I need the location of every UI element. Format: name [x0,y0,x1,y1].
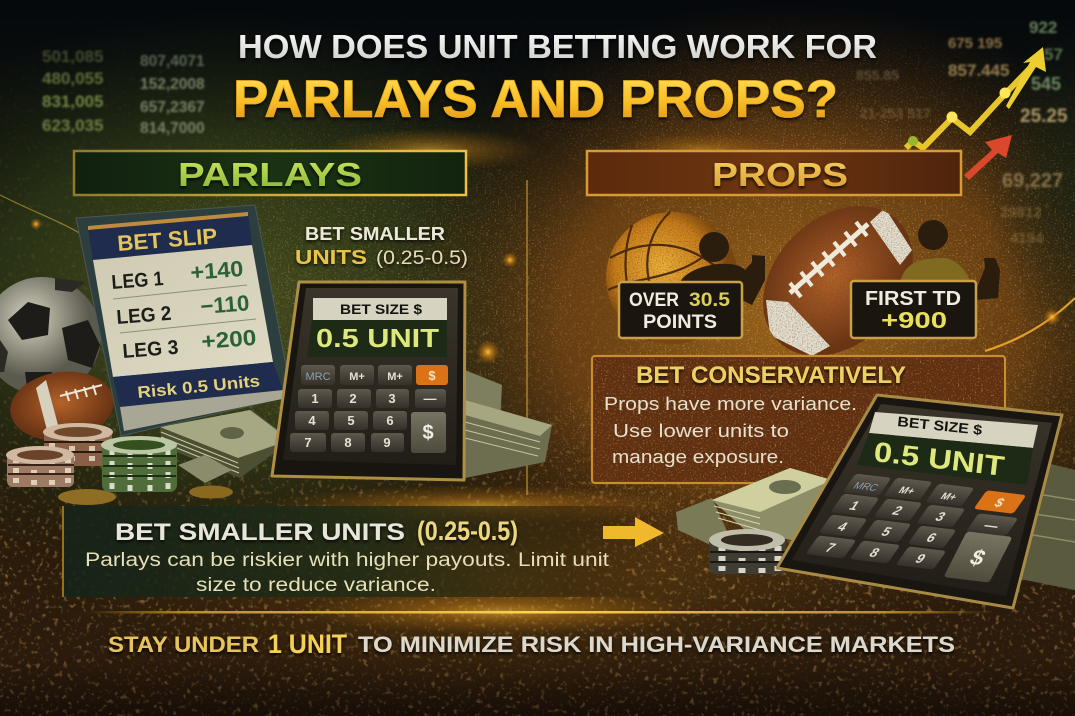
calculator keys: 6 [386,413,394,428]
label: first td +900: +900 [881,307,947,333]
calculator keys: 3 [388,391,396,406]
background ticker numbers: 623,035 [42,116,103,135]
brown chips back [43,423,113,466]
calculator keys: 3 [932,509,950,524]
arrow: callout to calculator [603,517,664,547]
background ticker numbers: 57 [1044,45,1063,64]
calculator keys: 9 [383,435,391,450]
decorative glow lines [0,128,1075,634]
calculator keys: 2 [889,503,907,518]
label: over 30.5 points: 30.5 [689,290,730,311]
calculator keys: 1 [311,391,319,406]
background ticker numbers: 21-253 517 [860,105,931,121]
heading: bet smaller units: BET SMALLER UNITS [115,519,405,546]
text: bet smaller units parlays: (0.25-0.5) [376,248,468,269]
calculator display value: 0.5 UNIT [316,323,439,353]
heading: bet conservatively: BET CONSERVATIVELY [636,362,906,389]
text: props variance: Props have more variance. [604,394,857,414]
icon: coins [58,486,233,505]
panel: bet conservatively [592,356,1005,483]
green chips [101,436,177,492]
label: first td +900: FIRST TD [865,288,961,310]
background ticker numbers: 855.85 [856,67,899,83]
icon: basketball [606,211,736,344]
text: parlays explanation: Parlays can be riskier with higher payouts. Limit unit [85,550,610,571]
calculator keys: — [424,391,436,406]
text: bet smaller units parlays: UNITS [295,247,367,269]
slip card [76,205,292,436]
background ticker numbers: 922 [1029,18,1057,37]
calculator keys: 2 [349,391,357,406]
heading: parlays: PARLAYS [178,156,362,193]
calculator keys: $ [966,545,990,570]
leg 1: +140 [189,256,244,285]
calculator: props [777,395,1062,608]
text: props variance [604,394,857,467]
background ticker numbers: 69,227 [1002,170,1063,192]
background ticker numbers: 25.25 [1020,106,1068,127]
background ticker numbers: 675 195 [948,35,1002,52]
text: props variance: Use lower units to [613,421,789,441]
calculator display label: BET SIZE $ [340,301,422,317]
calculator: parlays [272,282,465,480]
icon: chip stack props [709,529,786,574]
calculator keys [290,365,448,453]
title line 2: PARLAYS AND PROPS? [233,70,838,129]
calculator keys: 6 [923,530,941,545]
calculator display value: 0.5 UNIT [872,436,1006,482]
calculator keys: $ [428,368,436,383]
leg 3 [122,325,257,363]
calculator keys: 5 [878,524,896,539]
footer takeaway [108,629,955,659]
title line 1: HOW DOES UNIT BETTING WORK FOR [238,28,877,65]
calculator keys: $ [422,422,434,444]
slip risk: Risk 0.5 Units [137,372,261,402]
icon: cash stack right of calculator [465,370,552,478]
calculator display label: BET SIZE $ [897,413,983,438]
panel: parlays callout [63,506,690,597]
slip header band [88,213,252,261]
icon: cash stack props [676,455,1075,590]
heading: props: PROPS [712,156,848,193]
icon: football left [6,365,118,447]
calculator keys: MRC [305,371,331,383]
background ticker numbers: 152,2008 [140,76,205,93]
background ticker numbers: 657,2367 [140,99,205,116]
text: parlays explanation [85,550,610,596]
background ticker numbers: 545 [1031,74,1061,94]
calculator keys: 1 [846,498,864,513]
yellow trend arrow [906,47,1046,148]
icon: soccer ball [0,277,101,396]
label: over 30.5 points: POINTS [643,312,717,333]
calculator keys: — [980,518,1003,533]
calculator keys: M+ [387,371,403,383]
background ticker numbers: 480,055 [42,69,103,88]
label: first td +900 [851,281,976,338]
leg 3: +200 [200,325,257,354]
background ticker numbers: 857.445 [948,61,1009,80]
footer takeaway: STAY UNDER [108,632,259,657]
bet slip [76,205,292,436]
icon: player silhouette right [900,220,1000,300]
label: over 30.5 points: OVER [629,290,679,311]
calculator keys: M+ [349,371,365,383]
leg 2: −110 [199,290,250,319]
text: props variance: manage exposure. [612,447,784,467]
icon: player silhouette left [680,232,765,305]
calculator keys: 4 [308,413,316,428]
leg 1: LEG 1 [111,268,164,294]
label: over 30.5 points [619,282,742,338]
calculator display label [869,412,1038,448]
calculator keys: 8 [344,435,352,450]
calculator keys: MRC [851,480,881,494]
icon: poker chip stacks [6,423,177,492]
text: parlays explanation: size to reduce variance. [196,575,436,596]
leg 2 [116,290,250,329]
background ticker numbers: 831,005 [42,92,103,111]
calculator keys: 5 [347,413,355,428]
calculator keys: $ [991,495,1009,510]
calculator keys [806,474,1026,583]
slip paper [93,245,273,377]
heading: bet smaller units [115,516,518,546]
heading: bet smaller units: (0.25-0.5) [417,516,518,546]
calculator keys: 9 [912,551,930,566]
calculator keys: 4 [834,519,852,534]
slip footer band [113,362,283,407]
calculator display value [307,320,447,357]
footer takeaway: TO MINIMIZE RISK IN HIGH-VARIANCE MARKETS [358,632,955,657]
brown chips front [6,446,74,487]
icon: rising chart arrows [906,47,1046,180]
background ticker numbers [42,18,1068,247]
calculator keys: M+ [938,491,959,503]
divider: bottom gold line [85,611,990,614]
background ticker numbers: 501,085 [42,47,103,66]
background ticker numbers: 814,7000 [140,120,205,137]
calculator display value [857,433,1033,485]
calculator keys: 7 [304,435,312,450]
leg 1 [111,256,244,294]
slip title: BET SLIP [116,223,218,256]
text: bet smaller units parlays [295,224,468,269]
leg 2: LEG 2 [116,303,172,329]
background ticker numbers: 807,4071 [140,53,205,70]
icon: cash stack left [160,410,292,483]
background ticker numbers: 29812 [1000,204,1042,221]
panel: parlays header [74,151,466,195]
footer takeaway: 1 UNIT [268,629,347,659]
icon: football props [763,206,913,355]
calculator keys: 8 [866,545,884,560]
panel: props header [587,151,961,195]
red trend arrow [964,135,1012,180]
background ticker numbers: 4194 [1010,230,1044,247]
calculator keys: M+ [896,485,917,497]
calculator keys: 7 [822,540,840,555]
leg 3: LEG 3 [122,337,179,363]
text: bet smaller units parlays: BET SMALLER [305,224,445,244]
title [233,28,877,129]
calculator display label [313,298,447,320]
